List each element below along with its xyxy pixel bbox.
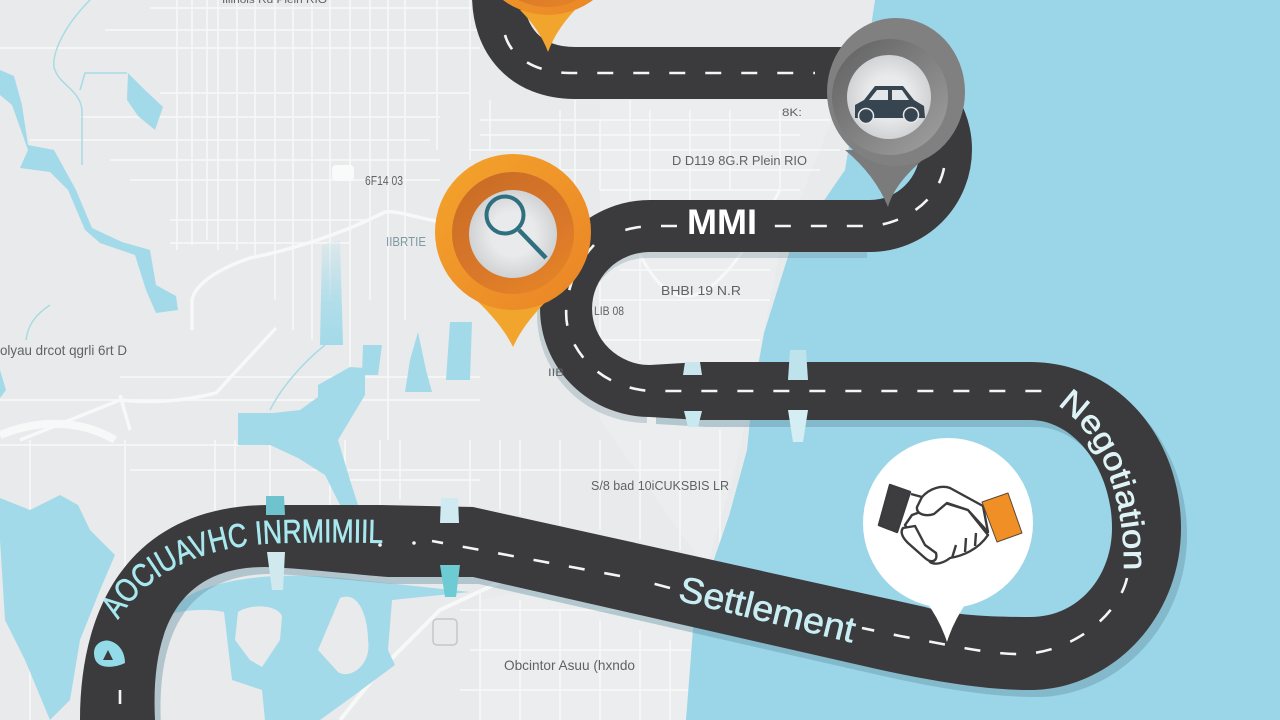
map: rivers and lakes: [0, 70, 472, 720]
road label: Negotiation: Negotiation: [1059, 388, 1145, 568]
map: thin creeks: [26, 0, 325, 410]
map: lake islands: [235, 597, 368, 674]
pin: grey with car: [827, 18, 965, 207]
map place labels: 6F14 03: [365, 173, 403, 188]
map place labels: IIB: [548, 367, 564, 379]
map place labels: Obcintor Asuu (hxndo: [504, 657, 635, 673]
road lane dashes: [120, 35, 1127, 704]
map place labels: olyau drcot qgrli 6rt D: [0, 342, 127, 358]
map: lighter coastal district: [480, 100, 840, 720]
map place labels: IIBRTIE: [386, 234, 426, 249]
road label: MMI: MMI: [687, 203, 757, 242]
icon: magnifying glass: [486, 196, 546, 258]
map place labels: 8K:: [782, 107, 802, 119]
overpass tabs: [266, 350, 808, 597]
pin: handshake: [863, 438, 1033, 642]
pin: top orange (partly cropped): [473, 0, 623, 52]
pin: orange with magnifier: [435, 154, 591, 347]
map: major diagonal roads: [0, 190, 780, 720]
road dots: [378, 541, 416, 547]
map icon: small marker: [433, 619, 457, 645]
sea: [686, 0, 1280, 720]
map place labels: BHBI 19 N.R: [661, 283, 741, 298]
road label: Settlement: Settlement: [675, 568, 860, 650]
road marker: start icon: [94, 640, 125, 667]
map place labels: D D119 8G.R Plein RIO: [672, 154, 807, 168]
road label: accident / MMI: AOCIUAVHC INRMIMIIL: [103, 519, 382, 620]
map place labels: S/8 bad 10iCUKSBIS LR: [591, 478, 729, 493]
map: white junction patch: [332, 165, 354, 181]
map place labels: LIB 08: [594, 304, 624, 318]
road shadow: [86, 232, 1187, 720]
icon: handshake: [879, 485, 1022, 564]
map: street grid: [0, 0, 840, 720]
icon: car: [855, 86, 925, 124]
map place labels: [0, 0, 807, 673]
